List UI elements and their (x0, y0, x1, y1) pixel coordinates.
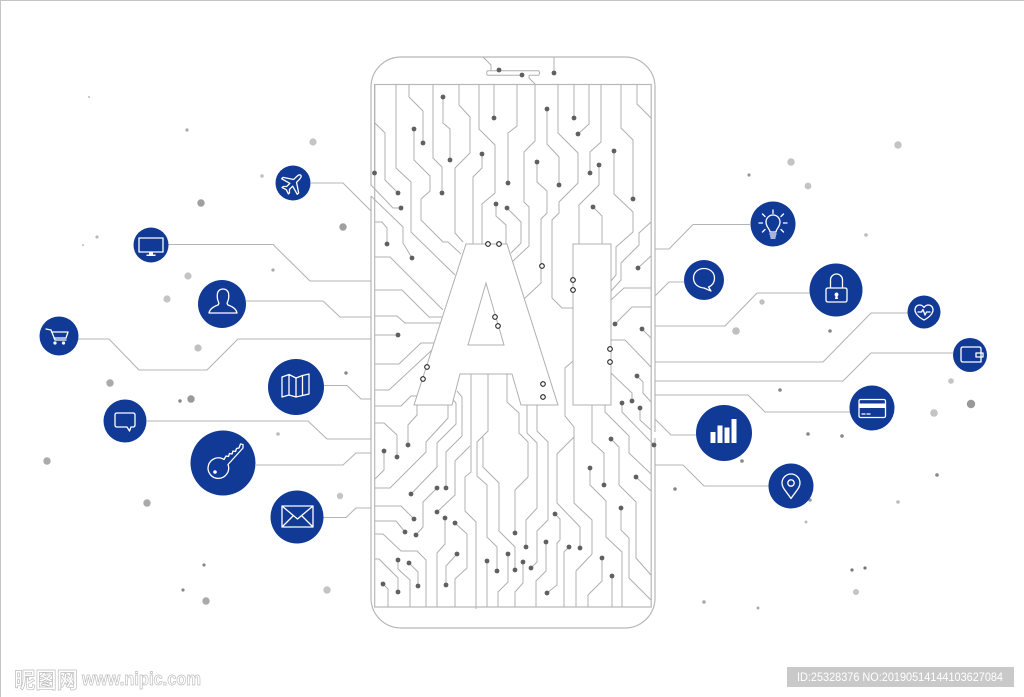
icon: envelope (270, 490, 324, 544)
connector wires left (78, 183, 371, 518)
icon: speech bubble (684, 260, 724, 300)
watermark: nipic logo (14, 668, 201, 693)
icon: location pin (768, 464, 814, 508)
watermark: nipic logo: www.nipic.com (81, 669, 201, 689)
icon: key (190, 430, 256, 496)
connector wires right (655, 224, 953, 486)
icon: airplane (276, 166, 310, 200)
hollow connector dots (421, 242, 612, 399)
icon: light bulb (750, 202, 796, 246)
circuit end dots (372, 68, 656, 595)
icon: person (198, 280, 246, 328)
icon: monitor (134, 228, 168, 262)
icon: heart pulse (908, 296, 940, 328)
upper circuit traces (371, 84, 651, 308)
watermark: id bar: ID:25328376 NO:20190514144103627084 (797, 670, 1003, 684)
middle circuit traces (375, 257, 654, 474)
watermark: id bar (787, 667, 1014, 687)
icon: chat bubble (104, 400, 146, 442)
speaker notch (483, 57, 554, 84)
lower circuit traces (375, 361, 651, 609)
icon: map (268, 359, 324, 415)
phone with circuit board (371, 57, 656, 628)
icon: credit card (850, 386, 894, 430)
letter A (414, 244, 558, 405)
watermark: nipic logo: 昵图网 (14, 668, 78, 693)
phone frame (371, 57, 655, 628)
screen outline (375, 84, 651, 607)
letter I (573, 244, 611, 405)
icon: bar chart (696, 405, 752, 461)
icon: padlock (810, 264, 862, 316)
icon: wallet (953, 338, 987, 372)
scattered background dots (43, 96, 975, 610)
icon: shopping cart (40, 316, 78, 356)
